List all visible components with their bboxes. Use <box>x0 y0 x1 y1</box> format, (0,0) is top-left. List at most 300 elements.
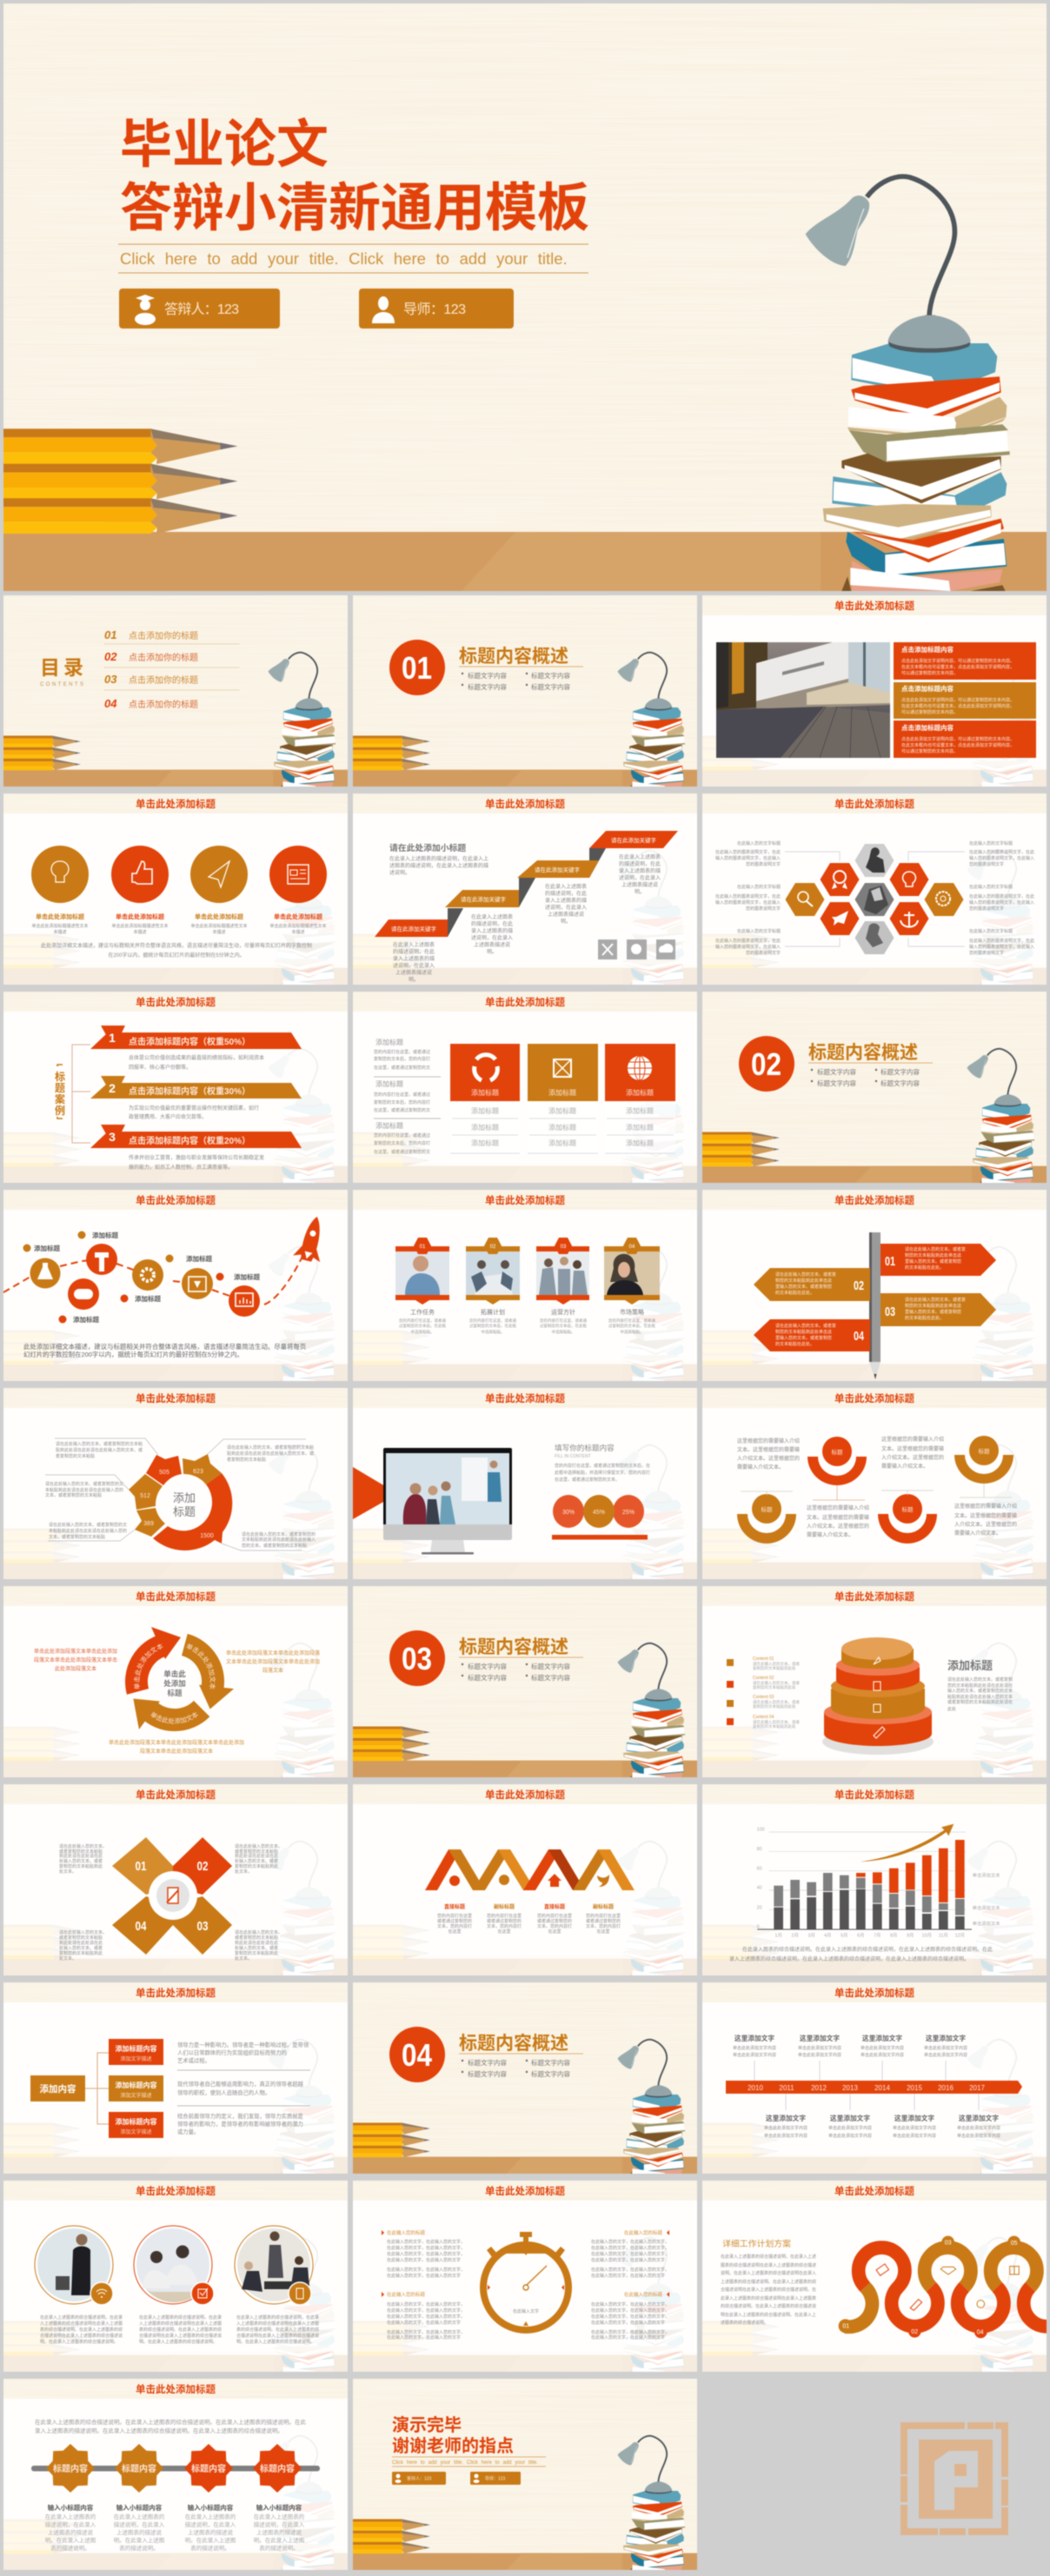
bar chart: 单击添加文本 <box>973 1871 1000 1878</box>
captions: 单击此处添加标题 <box>195 913 243 920</box>
column 3 <box>605 1044 675 1153</box>
lower labels <box>764 2114 1000 2139</box>
timeline arrow bar: 2010 <box>748 2084 763 2092</box>
branch box 1: 添加标题内容 <box>115 2044 156 2053</box>
branch box 1: 添加文字描述 <box>120 2055 152 2062</box>
slide: weighted banners <box>3 992 348 1185</box>
timeline stems <box>754 2061 979 2110</box>
cycle diagram: 单击此处添加文本 <box>150 1711 198 1724</box>
banner 1 text: 总体是公司价值创造成果的最直接的绩效指标，如利润资本 <box>129 1054 264 1061</box>
section bullets: 标题文字内容 <box>531 1673 570 1682</box>
right text: 请在此处输入您的文本。或者复制 <box>947 1676 1013 1683</box>
slide: stacked bar chart <box>702 1784 1047 1978</box>
step 4 text: 明。 <box>635 889 645 895</box>
ribbon labels: 副标标题 <box>494 1903 515 1910</box>
ribbon labels: 直接标题 <box>444 1903 465 1910</box>
bar chart: 4月 <box>824 1932 831 1938</box>
column 2: 添加标题 <box>548 1106 576 1115</box>
branch text 3 <box>177 2112 304 2135</box>
column 1: 添加标题 <box>471 1106 499 1115</box>
branch text 3: 领导者的影响力，是领导者的有影响被领导者的潜力 <box>177 2120 303 2128</box>
contents list: 04 <box>104 697 117 710</box>
bottom text: 单击此处添加段落文本单击此处添加段落文本单击此处添加 <box>109 1739 244 1746</box>
photo card 3 <box>536 1238 589 1305</box>
left text: 段落文本单击此处添加段落文本单击 <box>34 1656 117 1663</box>
text 02: 到此处请在此处请在此 <box>235 1853 278 1859</box>
right text: 添加标题 <box>947 1659 993 1672</box>
left text block: 在此输入您的文字，在此输入您的文字， <box>387 2245 465 2251</box>
ribbon labels: 您的内容打在这里 <box>537 1913 572 1919</box>
panel 3: 可以通过复制您的文本内容。 <box>901 748 958 754</box>
lower labels: 单击此处添加文字内容 <box>828 2133 872 2139</box>
left text list: 您的内容打在这里，或者通过 <box>374 1132 430 1139</box>
right text: 粘贴到此处请在此处输入您的文本 <box>947 1694 1013 1700</box>
connector lines <box>785 852 965 946</box>
bottom text: 段落文本单击此处添加段落文本 <box>140 1748 213 1755</box>
legend: Content 04 <box>753 1715 774 1720</box>
step labels: 添加标题 <box>234 1272 260 1281</box>
slide title: 单击此处添加标题 <box>834 1194 914 1206</box>
red bar <box>552 1535 648 1540</box>
right labels: 在此输入您的图表说明文字，在此 <box>969 849 1034 855</box>
half ring orange top <box>954 1436 1013 1497</box>
banner 3 <box>90 1125 302 1148</box>
lower labels: 单击此处添加文字内容 <box>957 2133 1000 2139</box>
closing title <box>392 2414 514 2456</box>
description text <box>23 1343 306 1358</box>
section bullets: 标题文字内容 <box>468 1662 507 1670</box>
text 02: 复制您的文本粘贴到此 <box>235 1863 278 1869</box>
badge column text 2: 在此录入上述图表的 <box>114 2513 165 2520</box>
step 4 text: 上述图表描述说 <box>621 881 658 888</box>
right labels: 您的图表说明文字 <box>969 861 1004 867</box>
cycle diagram: 单击此 <box>163 1670 186 1678</box>
banner 3 text: 展的能力，如员工人数控制、员工满意度等。 <box>129 1164 233 1171</box>
slide: timeline <box>702 1982 1047 2176</box>
column 2: 添加标题 <box>548 1139 576 1147</box>
section bullets: 标题文字内容 <box>468 2069 507 2078</box>
callout text lower left: 本粘贴到此处请在此处请在此处输入您的 <box>49 1528 127 1534</box>
ribbon labels: 您的内容打在这里 <box>487 1913 522 1919</box>
text block 1: 文本。这里根据您的需要输 <box>737 1446 800 1453</box>
right labels: 在此输入您的文字标题 <box>969 928 1013 934</box>
panel 2: 可以通过复制您的文本内容。 <box>901 709 958 715</box>
column text 1 <box>40 2314 123 2345</box>
bar chart: 40 <box>757 1886 762 1891</box>
right text block: 在此输入您的文字，在此输入您的文字， <box>591 2301 669 2307</box>
callout text lower left: 文本。或者复制您的文本粘贴 <box>49 1534 105 1540</box>
icon circle: bulb <box>31 846 89 903</box>
ribbon labels: 您的内容打在这里 <box>586 1913 621 1919</box>
donut chart: 添加 <box>173 1491 196 1504</box>
timeline arrow bar: 2017 <box>969 2084 985 2092</box>
bar chart: 0 <box>757 1924 760 1929</box>
number badge 02 <box>739 1036 794 1092</box>
arrow 03: 03 <box>885 1305 895 1319</box>
right text <box>226 1650 320 1674</box>
arrow 02: 制您的文本粘贴到此处单击这 <box>775 1278 832 1284</box>
closing button tutor <box>470 2472 521 2485</box>
slide title: 单击此处添加标题 <box>136 1194 216 1206</box>
badge column text 3: 在此录入上述图表的 <box>185 2513 236 2520</box>
plan text: 在此录入上述图表的综合描述说明，在此录入上述 <box>721 2254 816 2260</box>
arrow 02: 02 <box>854 1278 864 1293</box>
button: presenter <box>119 289 280 329</box>
pencil <box>869 1232 881 1379</box>
banner 2 text: 政管理费用、大客户应收欠款等。 <box>129 1113 207 1120</box>
step circle 1 <box>30 1258 61 1288</box>
photo captions: 您的内容打在这里，或者通 <box>540 1318 587 1324</box>
captions <box>31 913 327 935</box>
callout text middle left: 文本。或者复制您的文本粘贴 <box>45 1492 102 1498</box>
step labels: 添加标题 <box>34 1244 60 1252</box>
banner 2 text: 为实现公司价值最优的重要营运操作控制关键因素，如行 <box>129 1105 259 1112</box>
text block 1: 需要输入介绍文本。 <box>737 1464 784 1471</box>
slide title: 单击此处添加标题 <box>136 798 216 810</box>
root box: 添加内容 <box>40 2083 76 2095</box>
stopwatch: 在此输入文字 <box>513 2308 539 2314</box>
plan text: 的综合描述说明。在此录入上述图表的综合描述说 <box>721 2303 816 2309</box>
badge column text 3: 输入小标题内容 <box>188 2503 234 2512</box>
right text block: 在此输入您的文字，在此输入您的文字， <box>591 2251 669 2257</box>
section bullets: 标题文字内容 <box>531 1662 570 1670</box>
slide: section 01 <box>353 595 697 789</box>
timeline arrow bar: 2013 <box>842 2084 858 2092</box>
connector tree <box>72 1045 90 1143</box>
step 1 text: 在此录入上述图表 <box>393 941 435 948</box>
step 2 text: 的描述说明，在此 <box>471 920 513 927</box>
banner 1: 1 <box>109 1031 116 1045</box>
column 2 <box>528 1044 598 1153</box>
right labels: 在此输入您的图表说明文字，在此 <box>969 938 1034 944</box>
intro text: 述说明。 <box>389 869 410 876</box>
arrow 04: 里输入您的文本。或者复制您 <box>775 1335 832 1341</box>
column text 1: 合描述说明在此录入上述图表的综合描述说 <box>40 2333 123 2339</box>
panel 1: 可以通过复制您的文本内容。 <box>901 670 958 676</box>
description text: 此处添加详细文本描述，建议与标题相关并符合整体语言风格，语言描述尽量简洁生动。尽量将每页 <box>23 1343 306 1351</box>
column 3: 添加标题 <box>626 1106 654 1115</box>
slide: zigzag ribbon <box>353 1784 697 1978</box>
closing button presenter <box>392 2472 446 2485</box>
closing button presenter: 答辩人：123 <box>407 2475 432 2482</box>
left text block: 在此输入您的文字，在此输入您的文字， <box>387 2251 465 2257</box>
callout text top right <box>227 1444 314 1463</box>
text block 3: 这里根据您的需要输入介绍 <box>807 1504 869 1511</box>
closing title: 演示完毕 <box>392 2414 462 2435</box>
panel 2: 在此文本框内也可设置文本，点击此处添加文字说明内容， <box>901 703 1014 709</box>
plan text: 图表的综合描述说明在此录入上述图表的综合描述 <box>721 2262 816 2268</box>
heading: contents: 目录 <box>40 656 83 679</box>
cycle diagram: 单击此处添加文本 <box>133 1643 163 1690</box>
panel 1: 点击此处添加文字说明内容，可以通过复制您的文本内容。 <box>901 658 1014 664</box>
bar chart: 8月 <box>890 1932 897 1938</box>
slide: cycle arrows <box>3 1585 348 1778</box>
half ring red bottom: 标题 <box>902 1505 914 1513</box>
text 03: 处文本。 <box>235 1955 252 1962</box>
badge 4 <box>253 2444 302 2493</box>
heading text: FILL IN CONTENT <box>555 1454 591 1459</box>
right text: 此处 <box>947 1706 956 1712</box>
slide title: 单击此处添加标题 <box>834 2185 914 2197</box>
serpentine path <box>839 2236 1050 2338</box>
arrow 01: 01 <box>885 1254 895 1269</box>
photo captions: 过复制您的文本后，在此框 <box>399 1323 446 1329</box>
slide: three round photos <box>3 2181 348 2374</box>
right text block <box>591 2229 669 2340</box>
half ring red bottom <box>878 1490 937 1544</box>
photo: building plaza <box>716 642 890 758</box>
right text block: 在此输入您的文字，在此输入您的文字， <box>591 2329 669 2335</box>
captions: 单击此处添加标题描述性文本 <box>190 923 248 929</box>
round photo 2 <box>134 2226 214 2305</box>
legend: 复制您的文本粘贴到此处 <box>753 1665 796 1671</box>
text 01: 到此处请在此处请在此 <box>59 1853 103 1859</box>
text block 1: 入介绍文本。这里根据您的 <box>737 1455 800 1462</box>
badge column text 1 <box>45 2503 96 2552</box>
zigzag ribbon <box>425 1849 635 1890</box>
text 02: 请在此处输入您的文本。 <box>235 1843 282 1849</box>
photo captions <box>399 1308 655 1335</box>
branch box 3 <box>109 2112 163 2138</box>
left text: 单击此处添加段落文本单击此处添加 <box>34 1648 117 1655</box>
text block 3: 入介绍文本。这里根据您的 <box>807 1523 869 1530</box>
serpentine path: 01 <box>842 2324 849 2330</box>
column 1: 添加标题 <box>471 1088 499 1097</box>
donut chart: 标题 <box>173 1505 196 1518</box>
badge column text 2: 表的描述说明。 <box>119 2544 159 2552</box>
left labels: 在此输入您的文字标题 <box>737 884 781 890</box>
bar chart: 10月 <box>922 1932 932 1938</box>
icon circle: paper plane <box>190 846 248 903</box>
left labels: 输入您的图表说明文字，在此输入 <box>715 900 781 906</box>
heading text <box>555 1443 650 1483</box>
badge 3 <box>184 2444 233 2493</box>
bar chart <box>757 1824 1000 1938</box>
text 01: 或者复制您的文本粘贴 <box>59 1849 103 1855</box>
right labels: 输入您的图表说明文字，在此输入 <box>969 900 1034 906</box>
slide: four diamonds <box>3 1784 348 1978</box>
ribbon labels: 或者通过复制您的 <box>586 1918 621 1924</box>
description text <box>41 942 312 959</box>
section bullets: 标题文字内容 <box>468 2058 507 2067</box>
bar chart: 单击添加文本 <box>973 1920 1000 1927</box>
callout text top right: 贴到此处请在此处请在此处输入您的文本。或 <box>227 1451 314 1457</box>
slide: donut chart <box>3 1388 348 1582</box>
captions: 单击此处添加标题 <box>116 913 164 920</box>
arrow 03: 的文本粘贴在此处。 <box>905 1315 944 1321</box>
slide: section 04 <box>353 1982 697 2176</box>
column text 3: 明。在此录入上述图表的综合描述说明。 <box>236 2339 315 2345</box>
text 01: 复制您的文本粘贴到此 <box>59 1863 103 1869</box>
branch text 3: 结合前面领导力的定义，我们发现，领导力实质就是 <box>177 2112 304 2120</box>
lower labels: 单击此处添加文字内容 <box>764 2133 807 2139</box>
closing subtitle: Click here to add your title. Click here to add your title. <box>392 2460 538 2466</box>
section bullets: 标题文字内容 <box>817 1067 856 1076</box>
ribbon labels: 直接标题 <box>544 1903 565 1910</box>
photo captions: 中选择粘贴。 <box>410 1329 435 1335</box>
cycle diagram <box>124 1627 235 1732</box>
branch text 1: 领导力是一种影响力。领导者是一种影响过程。是带领 <box>177 2041 309 2048</box>
intro text: 在此录入上述图表的描述说明，在此录入上 <box>389 855 488 862</box>
donut chart: 505 <box>159 1470 169 1476</box>
icon circle: document <box>269 846 327 903</box>
number badge 01: 01 <box>402 650 432 686</box>
badge 1: 标题内容 <box>53 2463 88 2474</box>
text block 4: 需要输入介绍文本。 <box>954 1530 1001 1537</box>
step 3 text <box>545 883 587 925</box>
description text: 此处添加详细文本描述，建议与标题相关并符合整体语言风格，语言描述尽量简洁生动，尽量将每页幻灯片的字数控制 <box>41 942 312 949</box>
slide title: 单击此处添加标题 <box>834 600 914 612</box>
intro text <box>389 842 488 876</box>
bar chart: 12月 <box>955 1932 965 1938</box>
badge 4: 标题内容 <box>260 2463 295 2474</box>
hexagon cluster <box>786 844 963 954</box>
column text 1: 入上述图表的综合描述说明在此录入上述图 <box>40 2320 123 2327</box>
grey bar <box>31 2466 320 2472</box>
slide title: 单击此处添加标题 <box>834 798 914 810</box>
photo captions: 您的内容打在这里，或者通 <box>399 1318 446 1324</box>
badge column text 4: 输入小标题内容 <box>256 2503 302 2512</box>
section bullets <box>462 2058 570 2078</box>
right labels: 在此输入您的图表说明文字，在此 <box>969 893 1034 900</box>
text block 3: 需要输入介绍文本。 <box>807 1531 854 1538</box>
text 02: 或者复制您的文本粘贴 <box>235 1849 278 1855</box>
text 01: 处输入您的文本。或者 <box>59 1858 103 1864</box>
right text block: 在此输入您的文字，在此输入您的文字 <box>591 2320 665 2326</box>
left text block: 在此输入您的文字，在此输入您的文字， <box>387 2307 465 2314</box>
description text: 在200字以内，据统计每页幻灯片的最好控制在5分钟之内。 <box>108 952 245 959</box>
legend: 复制您的文本粘贴到此处 <box>753 1723 796 1730</box>
branch box 2 <box>109 2075 163 2101</box>
upper labels: 单击此处添加文字内容 <box>798 2045 841 2051</box>
branch box 2: 添加标题内容 <box>115 2081 156 2089</box>
section heading: 标题内容概述 <box>459 1637 568 1657</box>
photo captions: 中选择粘贴。 <box>551 1329 575 1335</box>
description text: 幻灯片的字数控制在200字以内，据统计每页幻灯片的最好控制在5分钟之内。 <box>23 1351 243 1358</box>
badge column text 4: 表的描述说明。 <box>259 2544 299 2552</box>
chart description: 在此录入图表的综合描述说明。在此录入上述图表的综合描述说明，在此录入上述图表的综合描述说明。在此 <box>742 1946 993 1953</box>
slide title: 单击此处添加标题 <box>136 2383 216 2395</box>
lower labels: 单击此处添加文字内容 <box>957 2125 1000 2131</box>
upper labels: 单击此处添加文字内容 <box>861 2052 904 2058</box>
ribbon labels: 您的内容打在这里 <box>437 1913 472 1919</box>
cycle diagram: 处添加 <box>163 1679 186 1688</box>
callout text top left: 贴到此处请在此处请在此处输入您的文本。或 <box>56 1447 143 1453</box>
step 1 text: 上述图表描述说 <box>395 969 432 976</box>
plan text: 说明。在此录入上述图表的综合描述说明在此录入 <box>721 2270 816 2276</box>
callout text lower right: 您的文本。或者复制您的文本粘贴 <box>242 1543 307 1549</box>
section bullets: 标题文字内容 <box>468 682 507 691</box>
left text block: 在此输入您的标题 <box>387 2229 426 2236</box>
branch text 1: 人们以日常群体的行为实现组织目标而努力的 <box>177 2048 287 2056</box>
captions: 单击此处添加标题描述性文本 <box>31 923 89 929</box>
section bullets: 标题文字内容 <box>531 2058 570 2067</box>
dashed route <box>3 1233 312 1305</box>
panel 1: 点击添加标题内容 <box>901 645 954 654</box>
branch box 3: 添加标题内容 <box>115 2117 156 2126</box>
lower labels: 这里添加文字 <box>766 2114 806 2122</box>
step circle 5 <box>182 1268 213 1299</box>
slide: four icon circles <box>3 793 348 987</box>
text block 1: 这里根据您的需要输入介绍 <box>737 1437 800 1444</box>
column text 1: 在此录入上述图表的综合描述说明，在此录 <box>40 2314 123 2320</box>
text 04: 到此处请在此处请在此 <box>59 1940 103 1946</box>
slide title: 单击此处添加标题 <box>136 2185 216 2197</box>
photo captions: 过复制您的文本后，在此框 <box>469 1323 516 1329</box>
text block 2: 文本。这里根据您的需要输 <box>881 1445 944 1452</box>
legend: 请在此输入您的文本。或者 <box>753 1680 800 1686</box>
left text list: 在这里，或者通过复制您的文 <box>374 1065 430 1071</box>
upper labels: 这里添加文字 <box>734 2034 774 2042</box>
vertical label: 题 <box>55 1082 65 1094</box>
legend: 请在此输入您的文本。或者 <box>753 1661 800 1667</box>
slide title: 单击此处添加标题 <box>485 1194 565 1206</box>
slide: photo and three text panels <box>702 595 1047 789</box>
right text: 您的文本粘贴到此处请在此处请在 <box>947 1683 1013 1689</box>
step 2 text: 明。 <box>487 949 497 955</box>
ribbon labels: 在这里 <box>497 1929 511 1935</box>
callout text lower left: 请在此处输入您的文本。或者复制您的文 <box>49 1522 127 1528</box>
photo card 2 <box>466 1238 520 1305</box>
heading text: 填写你的标题内容 <box>555 1443 615 1452</box>
diamond petals <box>112 1837 232 1955</box>
bar chart: 80 <box>757 1847 762 1852</box>
badge column text 1: 明。在此录入上述图 <box>45 2536 96 2544</box>
badge column text 3 <box>185 2503 236 2552</box>
badge 1 <box>46 2444 95 2493</box>
bar chart: 6月 <box>857 1932 864 1938</box>
contents list: 点击添加你的标题 <box>129 652 198 663</box>
left text list: 您的内容打在这里，或者通过 <box>374 1049 430 1055</box>
banner 1 text: 回报率、核心客户份额等。 <box>129 1064 191 1071</box>
column 1: 添加标题 <box>471 1123 499 1132</box>
callout text lower right: 请在此处输入您的文本。或者复制您的 <box>242 1531 316 1537</box>
slide title: 单击此处添加标题 <box>485 1789 565 1801</box>
captions: 本描述 <box>53 929 67 935</box>
donut chart: 389 <box>143 1521 154 1527</box>
step 3 text: 的描述说明，在此 <box>545 890 587 897</box>
lower labels: 这里添加文字 <box>830 2114 870 2122</box>
bar chart: 单击添加文本 <box>973 1904 1000 1911</box>
banner 3: 3 <box>109 1130 116 1144</box>
callout text top right: 者复制您的文本粘贴 <box>227 1457 266 1463</box>
text block 4: 入介绍文本。这里根据您的 <box>954 1521 1017 1528</box>
left text <box>34 1648 117 1672</box>
photo captions: 过复制您的文本后，在此框 <box>608 1323 655 1329</box>
timeline arrow bar: 2016 <box>938 2084 954 2092</box>
right text block: 在此输入您的文字，在此输入您的文字 <box>591 2273 665 2279</box>
upper labels: 单击此处添加文字内容 <box>924 2052 967 2058</box>
text block 2: 入介绍文本。这里根据您的 <box>881 1454 944 1461</box>
left labels: 输入您的图表说明文字，在此输入 <box>715 944 781 950</box>
section bullets: 标题文字内容 <box>531 671 570 680</box>
branch text 1 <box>177 2041 310 2070</box>
bar chart: 20 <box>757 1905 762 1910</box>
left labels: 输入您的图表说明文字，在此输入 <box>715 855 781 861</box>
left text list: 添加标题 <box>375 1121 403 1130</box>
slide: pencil with signpost arrows <box>702 1190 1047 1384</box>
photo card 3: 03 <box>561 1245 567 1250</box>
slide: contents <box>3 595 348 789</box>
step labels: 添加标题 <box>73 1315 99 1324</box>
left text list <box>374 1038 441 1155</box>
step 3 text: 明。 <box>561 919 571 925</box>
button: tutor <box>359 289 514 329</box>
contents list <box>104 628 240 710</box>
right text block: 在此输入您的文字，在此输入您的文字， <box>591 2314 669 2320</box>
staircase <box>375 831 678 937</box>
percentage ovals: 45% <box>593 1510 605 1516</box>
